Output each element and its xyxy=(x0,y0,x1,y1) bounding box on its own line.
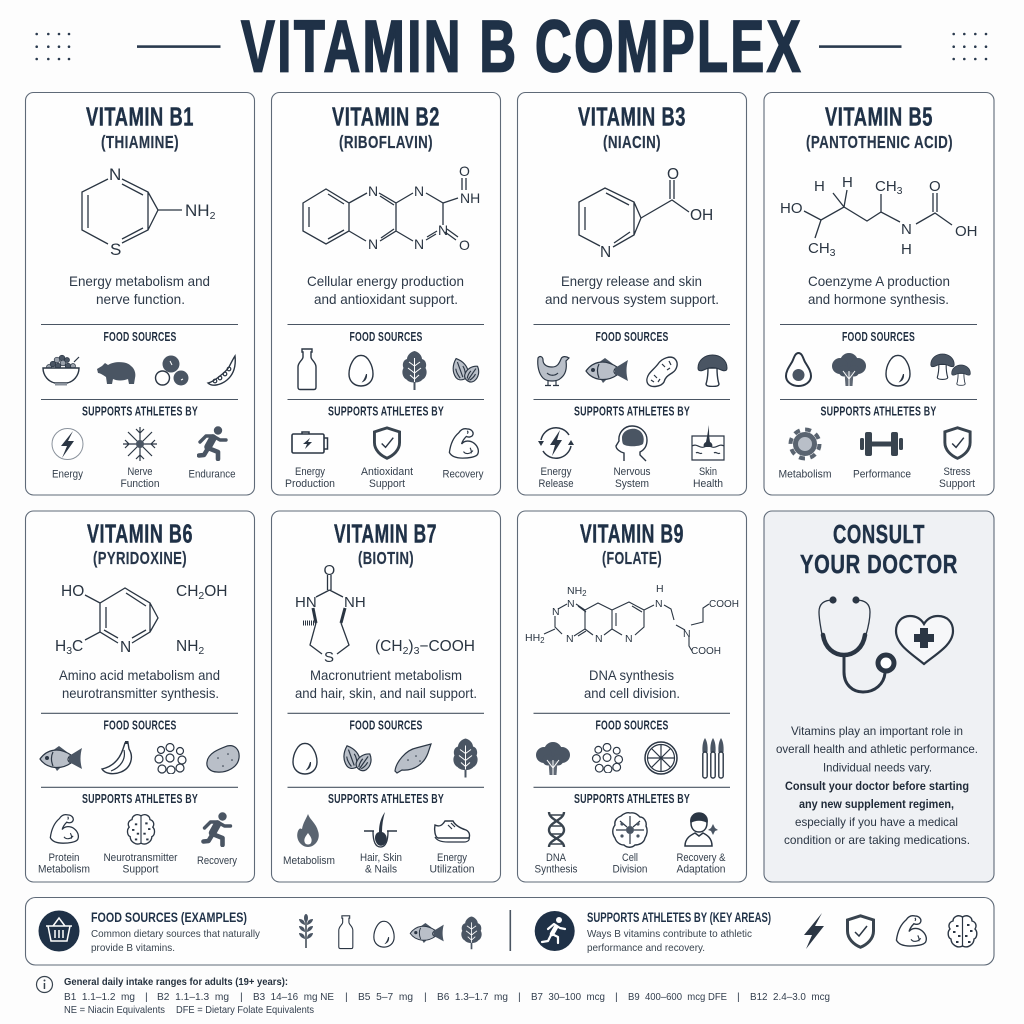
description: DNA synthesis xyxy=(589,667,674,683)
support labels: Performance xyxy=(853,469,911,481)
molecule: folate: N xyxy=(595,633,603,645)
food icons xyxy=(293,738,478,778)
panel: vitamin B1 xyxy=(26,92,254,495)
support labels xyxy=(778,466,975,490)
molecule: folate: N xyxy=(683,628,691,640)
molecule: folate: COOH xyxy=(709,598,739,610)
footnote: daily intake ranges: | xyxy=(345,991,348,1003)
molecule: thiamine: 2 xyxy=(210,210,216,222)
support labels: Metabolism xyxy=(38,864,90,876)
label: supports athletes: SUPPORTS ATHLETES BY xyxy=(328,404,444,418)
support labels: Hair, Skin xyxy=(360,852,402,864)
support labels: Energy xyxy=(437,852,467,864)
heading: vitamin B9: VITAMIN B9 xyxy=(580,520,684,548)
legend food icons xyxy=(299,914,482,949)
consult text: overall health and athletic performance. xyxy=(776,742,978,756)
footnote: daily intake ranges: B3 14–16 mg NE xyxy=(253,991,334,1003)
support labels: DNA xyxy=(546,852,567,864)
label: supports athletes: SUPPORTS ATHLETES BY xyxy=(574,404,690,418)
support labels xyxy=(38,852,237,876)
molecule: biotin: 2 xyxy=(403,645,409,657)
label: supports athletes: SUPPORTS ATHLETES BY xyxy=(328,792,444,806)
molecule: folate: N xyxy=(566,633,574,645)
description: Coenzyme A production xyxy=(808,273,950,289)
heading: vitamin B1: VITAMIN B1 xyxy=(86,104,194,132)
heading: vitamin B7: VITAMIN B7 xyxy=(334,520,437,548)
molecule: riboflavin: N xyxy=(368,183,378,199)
support labels: Production xyxy=(285,478,335,490)
food icons xyxy=(298,349,483,390)
legend: food sources text: Common dietary sources that naturally xyxy=(91,928,261,940)
molecule: pantothenic acid: 3 xyxy=(830,247,836,259)
support labels: Recovery xyxy=(442,469,484,481)
label: food sources: FOOD SOURCES xyxy=(350,719,422,733)
support labels: & Nails xyxy=(365,864,397,876)
footnote: daily intake ranges: B2 1.1–1.3 mg xyxy=(157,991,229,1003)
food icons xyxy=(538,355,727,386)
description: Energy metabolism and xyxy=(69,273,210,289)
subheading: riboflavin: (RIBOFLAVIN) xyxy=(339,132,433,152)
support labels: Protein xyxy=(48,852,80,864)
molecule: thiamine: N xyxy=(109,165,121,184)
molecule: folate: H xyxy=(656,583,664,595)
molecule: biotin: O xyxy=(324,562,335,579)
support icons xyxy=(549,812,718,847)
support labels: Antioxidant xyxy=(361,466,413,478)
legend: supports athletes text: SUPPORTS ATHLETES BY (KEY AREAS) xyxy=(587,910,771,925)
footnote: daily intake ranges: | xyxy=(145,991,148,1003)
molecule: pyridoxine: 2 xyxy=(198,645,204,657)
support labels: Function xyxy=(120,478,160,490)
icon: stethoscope and heart xyxy=(819,596,953,692)
molecule: thiamine: NH xyxy=(185,201,210,220)
support labels xyxy=(283,852,474,876)
heading: vitamin B6: VITAMIN B6 xyxy=(87,520,193,548)
support labels: Metabolism xyxy=(283,855,335,867)
label: food sources: FOOD SOURCES xyxy=(350,330,422,344)
footnote: daily intake ranges: B1 1.1–1.2 mg xyxy=(64,991,135,1003)
molecule: pyridoxine: 3 xyxy=(66,645,72,657)
support labels: Skin xyxy=(699,466,717,478)
support labels: Cell xyxy=(622,852,638,864)
support labels: Metabolism xyxy=(778,469,832,481)
molecule: riboflavin: N xyxy=(414,236,424,252)
footnote: daily intake ranges: | xyxy=(240,991,243,1003)
molecule: riboflavin: O xyxy=(459,237,470,253)
molecule: niacin: N xyxy=(600,244,611,261)
footnote: daily intake ranges: B5 5–7 mg xyxy=(358,991,413,1003)
description xyxy=(69,273,210,307)
molecule: folate: N xyxy=(655,598,663,610)
panel: vitamin B7 xyxy=(272,511,500,882)
description: Macronutrient metabolism xyxy=(310,667,462,683)
label: food sources: FOOD SOURCES xyxy=(596,719,668,733)
support labels xyxy=(285,466,484,490)
support labels: Recovery & xyxy=(676,852,726,864)
molecule: thiamine: S xyxy=(110,240,121,259)
support labels: Recovery xyxy=(197,855,237,867)
description xyxy=(584,667,680,701)
support labels: Synthesis xyxy=(534,864,578,876)
consult text: especially if you have a medical xyxy=(795,815,958,829)
panel: vitamin B3 xyxy=(518,92,746,495)
heading: consult your doctor: YOUR DOCTOR xyxy=(800,551,958,579)
description: and cell division. xyxy=(584,685,680,701)
icon: runner badge xyxy=(535,911,575,951)
description: and antioxidant support. xyxy=(314,291,458,307)
molecule: thiamine xyxy=(82,165,216,259)
icon: basket xyxy=(38,910,80,952)
molecule: pantothenic acid: N xyxy=(901,221,912,238)
support labels: Nervous xyxy=(614,466,651,478)
subheading: pyridoxine: (PYRIDOXINE) xyxy=(93,548,187,568)
heading: vitamin B2: VITAMIN B2 xyxy=(332,104,440,132)
molecule: pyridoxine: H xyxy=(55,638,66,655)
icon: info xyxy=(36,976,52,992)
consult text: Individual needs vary. xyxy=(823,760,932,774)
support labels xyxy=(534,852,726,876)
description xyxy=(295,667,477,701)
legend: supports athletes text: Ways B vitamins contribute to athletic xyxy=(587,928,752,940)
food icons xyxy=(536,738,724,778)
label: food sources: FOOD SOURCES xyxy=(842,330,915,344)
footnote: daily intake ranges: General daily intake ranges for adults (19+ years): xyxy=(64,976,288,988)
consult text: condition or are taking medications. xyxy=(784,833,970,847)
label: supports athletes: SUPPORTS ATHLETES BY xyxy=(820,404,937,418)
support labels xyxy=(538,466,723,490)
footnote: daily intake ranges: B6 1.3–1.7 mg xyxy=(437,991,508,1003)
molecule: pyridoxine: N xyxy=(120,639,131,656)
panel: consult your doctor xyxy=(764,511,994,882)
molecule: pantothenic acid: OH xyxy=(955,223,978,240)
description: nerve function. xyxy=(96,291,185,307)
food icons xyxy=(43,355,235,386)
support icons xyxy=(52,426,226,461)
molecule: pantothenic acid: HO xyxy=(780,200,802,217)
heading: consult your doctor: CONSULT xyxy=(833,521,925,549)
molecule: riboflavin: N xyxy=(368,236,378,252)
molecule: pantothenic acid: H xyxy=(814,178,825,195)
label: food sources: FOOD SOURCES xyxy=(104,719,176,733)
footnote: daily intake ranges: | xyxy=(615,991,618,1003)
consult text: Consult your doctor before starting xyxy=(785,779,969,793)
molecule: pantothenic acid: CH xyxy=(808,240,830,257)
molecule: folate: N xyxy=(625,633,633,645)
support labels: Stress xyxy=(944,466,971,478)
description: and hair, skin, and nail support. xyxy=(295,685,477,701)
description: neurotransmitter synthesis. xyxy=(62,685,219,701)
molecule: riboflavin: N xyxy=(414,183,424,199)
footnote: daily intake ranges: | xyxy=(737,991,740,1003)
legend: supports athletes text xyxy=(587,910,771,954)
molecule: folate: N xyxy=(567,598,575,610)
description: and nervous system support. xyxy=(545,291,719,307)
molecule: riboflavin: O xyxy=(459,163,470,179)
support icons xyxy=(297,812,470,847)
molecule: pyridoxine: NH xyxy=(176,638,198,655)
subheading: thiamine: (THIAMINE) xyxy=(101,132,179,152)
support labels: Energy xyxy=(540,466,572,478)
footnote: daily intake ranges: NE = Niacin Equivalents xyxy=(64,1004,165,1016)
subheading: biotin: (BIOTIN) xyxy=(358,548,414,568)
molecule: biotin xyxy=(295,562,475,666)
molecule: riboflavin: NH xyxy=(460,190,480,206)
description: Amino acid metabolism and xyxy=(59,667,220,683)
panel: vitamin B2 xyxy=(272,92,500,495)
molecule: pantothenic acid: CH xyxy=(875,178,897,195)
legend: food sources text: FOOD SOURCES (EXAMPLES) xyxy=(91,910,247,925)
support icons xyxy=(538,425,724,461)
description xyxy=(59,667,220,701)
molecule: biotin: ) xyxy=(408,638,414,655)
molecule: pantothenic acid: O xyxy=(929,178,941,195)
molecule: pyridoxine: C xyxy=(72,638,83,655)
molecule: biotin: 3 xyxy=(414,645,420,657)
molecule: biotin: NH xyxy=(344,594,366,611)
description xyxy=(808,273,950,307)
subheading: pantothenic acid: (PANTOTHENIC ACID) xyxy=(806,132,953,152)
support labels: Endurance xyxy=(188,469,236,481)
panel: vitamin B9 xyxy=(518,511,746,882)
support labels xyxy=(52,466,236,490)
label: food sources: FOOD SOURCES xyxy=(596,330,668,344)
support labels: Release xyxy=(538,478,574,490)
molecule: niacin: O xyxy=(667,166,679,183)
footnote: daily intake ranges xyxy=(36,976,830,1016)
consult text: any new supplement regimen, xyxy=(799,797,954,811)
heading: vitamin B3: VITAMIN B3 xyxy=(578,104,686,132)
molecule: biotin: −COOH xyxy=(419,638,475,655)
footnote: daily intake ranges: B12 2.4–3.0 mcg xyxy=(750,991,830,1003)
molecule: pyridoxine: 2 xyxy=(198,590,204,602)
molecule: niacin xyxy=(579,166,713,261)
footnote: daily intake ranges: B9 400–600 mcg DFE xyxy=(628,991,727,1003)
heading: vitamin B5: VITAMIN B5 xyxy=(825,104,933,132)
molecule: biotin: HN xyxy=(295,594,317,611)
panel: legend strip xyxy=(26,898,994,965)
support labels: Support xyxy=(122,864,158,876)
footnote: daily intake ranges: | xyxy=(518,991,521,1003)
molecule: folate: NH xyxy=(567,585,582,597)
molecule: niacin: OH xyxy=(690,207,713,224)
label: supports athletes: SUPPORTS ATHLETES BY xyxy=(82,792,198,806)
label: supports athletes: SUPPORTS ATHLETES BY xyxy=(82,404,198,418)
molecule: pyridoxine xyxy=(55,583,227,657)
molecule: pantothenic acid: H xyxy=(901,241,912,258)
description: Cellular energy production xyxy=(307,273,464,289)
support icons xyxy=(292,428,478,458)
support labels: Neurotransmitter xyxy=(104,852,178,864)
food icons xyxy=(40,741,239,774)
molecule: pantothenic acid: 3 xyxy=(897,185,903,197)
label: food sources: FOOD SOURCES xyxy=(104,330,176,344)
support labels: Energy xyxy=(52,469,83,481)
heading: consult your doctor xyxy=(800,521,958,579)
molecule: riboflavin xyxy=(303,163,480,253)
support labels: Support xyxy=(939,478,975,490)
support labels: Health xyxy=(693,478,723,490)
molecule: folate: HH xyxy=(525,632,540,644)
food icons xyxy=(786,353,970,386)
footnote: daily intake ranges: | xyxy=(424,991,427,1003)
label: supports athletes: SUPPORTS ATHLETES BY xyxy=(574,792,690,806)
molecule: folate: N xyxy=(552,606,560,618)
description: and hormone synthesis. xyxy=(808,291,949,307)
consult text: Vitamins play an important role in xyxy=(791,724,963,738)
molecule: pantothenic acid xyxy=(780,174,978,259)
molecule: pantothenic acid: H xyxy=(842,174,853,191)
molecule: biotin: S xyxy=(324,649,334,666)
footnote: daily intake ranges: B7 30–100 mcg xyxy=(531,991,605,1003)
legend: supports athletes text: performance and recovery. xyxy=(587,942,705,954)
molecule: biotin: (CH xyxy=(375,638,403,655)
molecule: folate: COOH xyxy=(691,645,721,657)
description: Energy release and skin xyxy=(561,273,702,289)
molecule: folate: 2 xyxy=(582,589,587,598)
subheading: folate: (FOLATE) xyxy=(602,548,662,568)
support icons xyxy=(790,428,970,458)
support labels: Adaptation xyxy=(676,864,726,876)
support labels: Utilization xyxy=(430,864,474,876)
molecule: pyridoxine: OH xyxy=(204,583,227,600)
molecule: pyridoxine: CH xyxy=(176,583,198,600)
molecule: riboflavin: N xyxy=(438,222,448,238)
support labels: Support xyxy=(369,478,405,490)
support icons xyxy=(50,812,230,845)
legend: food sources text xyxy=(91,910,261,954)
legend: food sources text: provide B vitamins. xyxy=(91,942,175,954)
molecule: pyridoxine: HO xyxy=(61,583,84,600)
molecule: folate xyxy=(525,583,739,657)
legend support icons xyxy=(804,913,977,949)
panel: vitamin B6 xyxy=(26,511,254,882)
molecule: folate: 2 xyxy=(540,636,545,645)
consult text xyxy=(776,724,978,847)
subheading: niacin: (NIACIN) xyxy=(603,132,661,152)
support labels: Nerve xyxy=(128,466,152,478)
panel: vitamin B5 xyxy=(764,92,994,495)
support labels: System xyxy=(615,478,649,490)
footnote: daily intake ranges: DFE = Dietary Folate Equivalents xyxy=(176,1004,314,1016)
support labels: Energy xyxy=(295,466,325,478)
description xyxy=(307,273,464,307)
description xyxy=(545,273,719,307)
support labels: Division xyxy=(612,864,648,876)
